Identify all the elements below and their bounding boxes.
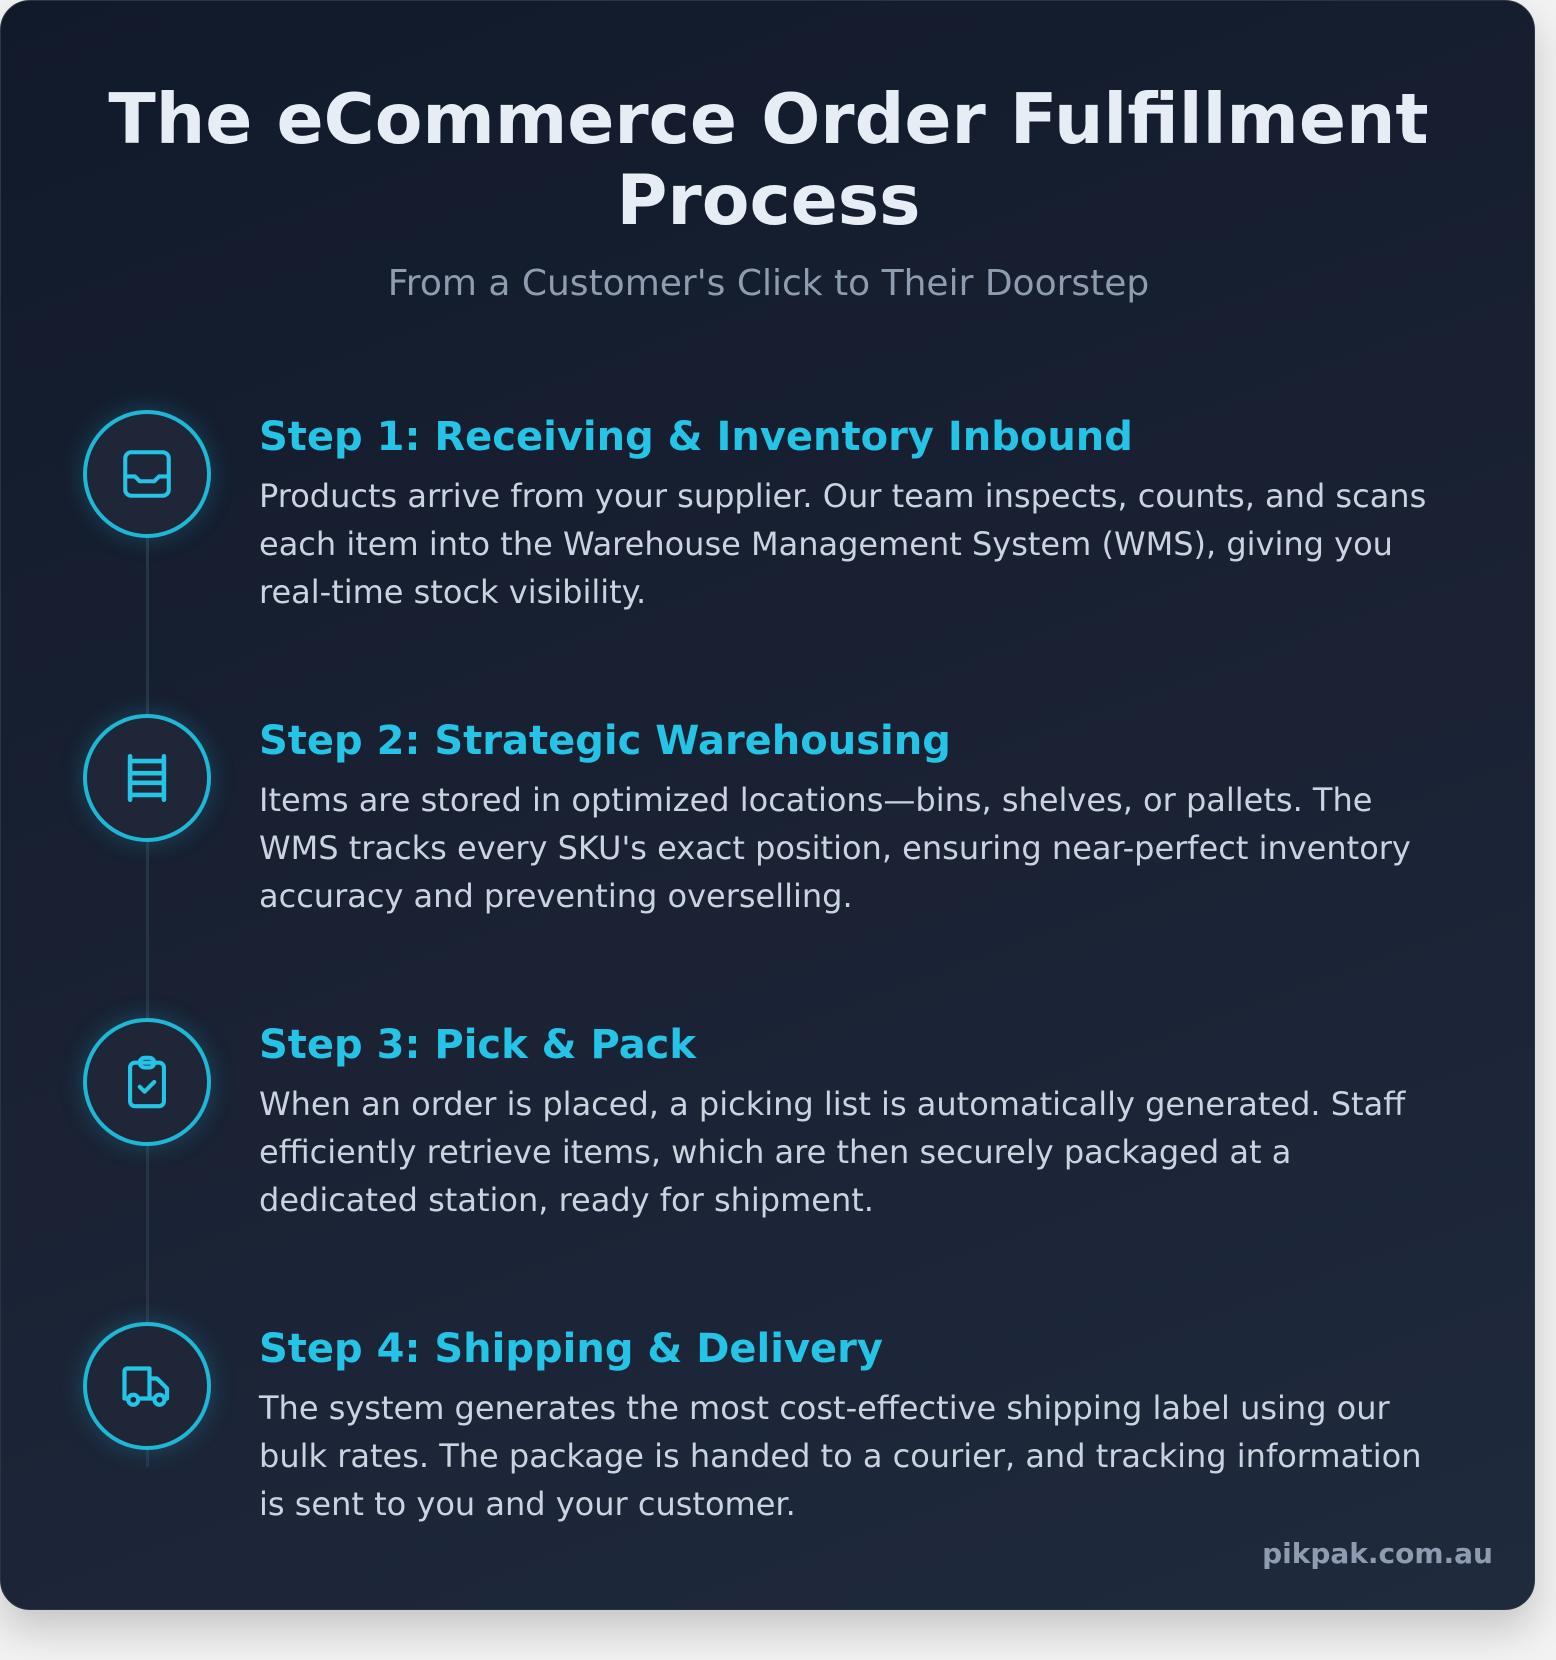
step 4 text [258,1326,1421,1523]
title [108,79,1429,241]
step 2 text: WMS tracks every SKU's exact position, ensuring near-perfect inventory [259,829,1411,867]
step 2 text: Items are stored in optimized locations—bins, shelves, or pallets. The [259,781,1372,819]
icon: inbox [83,410,211,538]
step 2 text: accuracy and preventing overselling. [259,877,853,915]
step 2 text: Step 2: Strategic Warehousing [259,718,951,764]
step 4 text: Step 4: Shipping & Delivery [259,1326,883,1372]
timeline line [146,537,149,1467]
subtitle: From a Customer's Click to Their Doorstep [388,263,1149,304]
step 1 text: Products arrive from your supplier. Our team inspects, counts, and scans [259,477,1426,515]
step 3 text [259,1022,1406,1219]
step 1 text: Step 1: Receiving & Inventory Inbound [259,414,1133,460]
step 2 text [259,718,1411,915]
step 1 text: each item into the Warehouse Management System (WMS), giving you [259,525,1393,563]
step 3 text: Step 3: Pick & Pack [259,1022,696,1068]
step 1 text [259,414,1426,611]
step 1 text: real-time stock visibility. [259,573,646,611]
step 4 text: bulk rates. The package is handed to a courier, and tracking information [259,1437,1421,1475]
title: Process [616,160,921,241]
step 4 text: is sent to you and your customer. [259,1485,796,1523]
icon: clipboard check [83,1018,211,1146]
icon: truck [83,1322,211,1450]
step 4 text: The system generates the most cost-effective shipping label using our [259,1389,1390,1427]
step 3 text: efficiently retrieve items, which are then securely packaged at a [259,1133,1291,1171]
icon: shelves [83,714,211,842]
footer brand: pikpak.com.au [1262,1537,1493,1570]
step 3 text: dedicated station, ready for shipment. [259,1181,874,1219]
step 3 text: When an order is placed, a picking list is automatically generated. Staff [259,1085,1405,1123]
title: The eCommerce Order Fulfillment [108,79,1429,160]
